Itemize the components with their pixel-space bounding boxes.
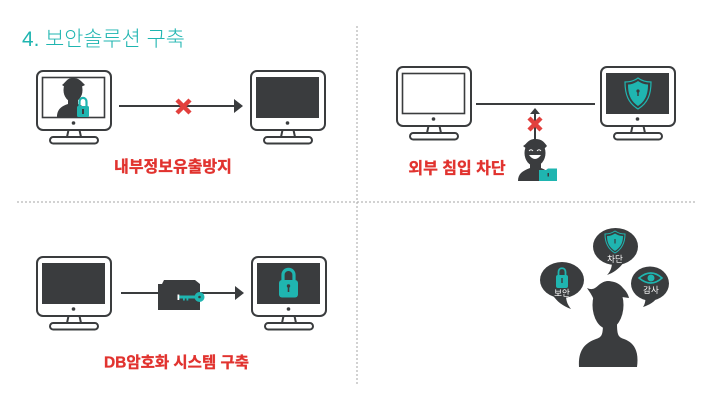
title: 4. 보안솔루션 구축 — [22, 28, 185, 51]
icon: destination monitor — [251, 71, 325, 144]
label: internal leak prevention: 내부정보유출방지 — [114, 158, 232, 176]
arrow: encrypted transfer — [121, 286, 244, 300]
horizontal divider — [17, 201, 695, 203]
speech bubble: blocking: 차단 — [607, 254, 623, 264]
speech bubble: audit: 감사 — [643, 285, 659, 295]
arrow: blocked intrusion — [529, 108, 541, 142]
icon: hacker with folder — [518, 139, 557, 181]
label: external intrusion blocking: 외부 침입 차단 — [408, 160, 506, 178]
vertical divider — [356, 26, 358, 385]
icon: person silhouette — [579, 281, 637, 367]
panel: internal leak prevention — [37, 71, 325, 176]
arrow: blocked transfer — [119, 99, 243, 113]
icon: monitor with padlock — [252, 257, 326, 330]
icon: source monitor — [37, 257, 111, 330]
label: DB encryption system: DB암호화 시스템 구축 — [104, 354, 249, 372]
icon: folder with key — [158, 280, 204, 310]
icon: blank monitor — [397, 67, 471, 140]
speech bubble: security: 보안 — [554, 288, 570, 298]
icon: monitor with user and lock — [37, 71, 111, 144]
panel: external intrusion blocking — [397, 67, 675, 181]
panel: DB encryption — [37, 257, 326, 372]
icon: monitor with shield — [601, 67, 675, 140]
panel: security person with speech bubbles — [540, 228, 669, 367]
connection line — [476, 103, 595, 105]
